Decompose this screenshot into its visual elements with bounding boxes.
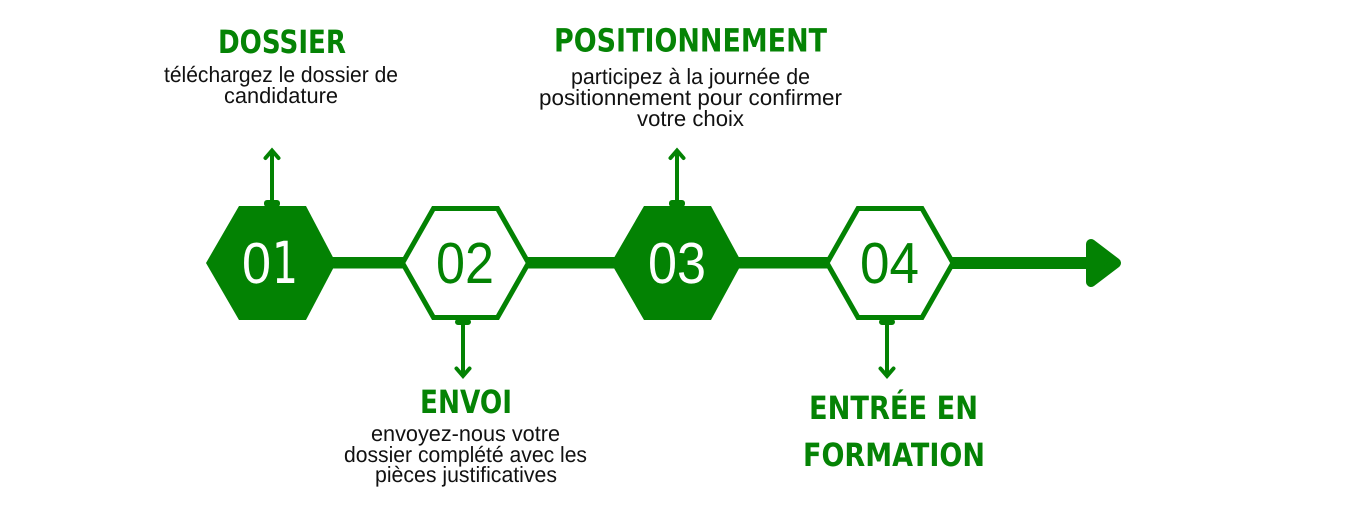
heading DOSSIER: DOSSIER <box>218 23 346 61</box>
description 01: téléchargez le dossier de <box>164 62 398 87</box>
number 01 <box>242 229 298 297</box>
number 01: 1 <box>272 229 298 297</box>
description 02: pièces justificatives <box>375 462 557 487</box>
heading ENVOI: ENVOI <box>420 383 512 421</box>
connector line 1 to 2 <box>330 257 405 268</box>
heading ENTRÉE EN FORMATION: FORMATION <box>803 436 985 474</box>
step 04 <box>803 208 985 474</box>
connector line 2 to 3 <box>525 257 620 268</box>
description 03 <box>539 64 842 131</box>
arrow down 02 <box>456 320 470 376</box>
step 02 <box>344 208 587 487</box>
number 03: 03 <box>648 231 706 296</box>
arrow up 01 <box>265 150 279 206</box>
description 02: envoyez-nous votre <box>371 421 560 446</box>
description 02 <box>344 421 587 487</box>
main arrow to the right <box>950 244 1116 282</box>
description 01 <box>164 62 398 108</box>
hexagon 01 <box>206 206 336 320</box>
hexagon 04 <box>827 208 953 318</box>
description 03: votre choix <box>637 106 744 131</box>
connector line 3 to 4 <box>736 257 830 268</box>
description 03: positionnement pour confirmer <box>539 85 842 110</box>
step 03 <box>539 22 842 320</box>
heading ENTRÉE EN FORMATION: ENTRÉE EN <box>809 389 978 427</box>
step 01 <box>164 23 398 320</box>
description 01: candidature <box>224 83 338 108</box>
number 04: 04 <box>860 231 919 296</box>
number 01: 0 <box>242 231 271 296</box>
arrow down 04 <box>880 320 894 376</box>
hexagon 03 <box>611 206 742 320</box>
heading POSITIONNEMENT: POSITIONNEMENT <box>554 22 827 60</box>
description 02: dossier complété avec les <box>344 442 587 467</box>
hexagon 02 <box>402 208 528 318</box>
description 03: participez à la journée de <box>571 64 810 89</box>
heading ENTRÉE EN FORMATION <box>803 389 985 474</box>
number 02: 02 <box>436 231 494 296</box>
arrow up 03 <box>670 150 684 206</box>
